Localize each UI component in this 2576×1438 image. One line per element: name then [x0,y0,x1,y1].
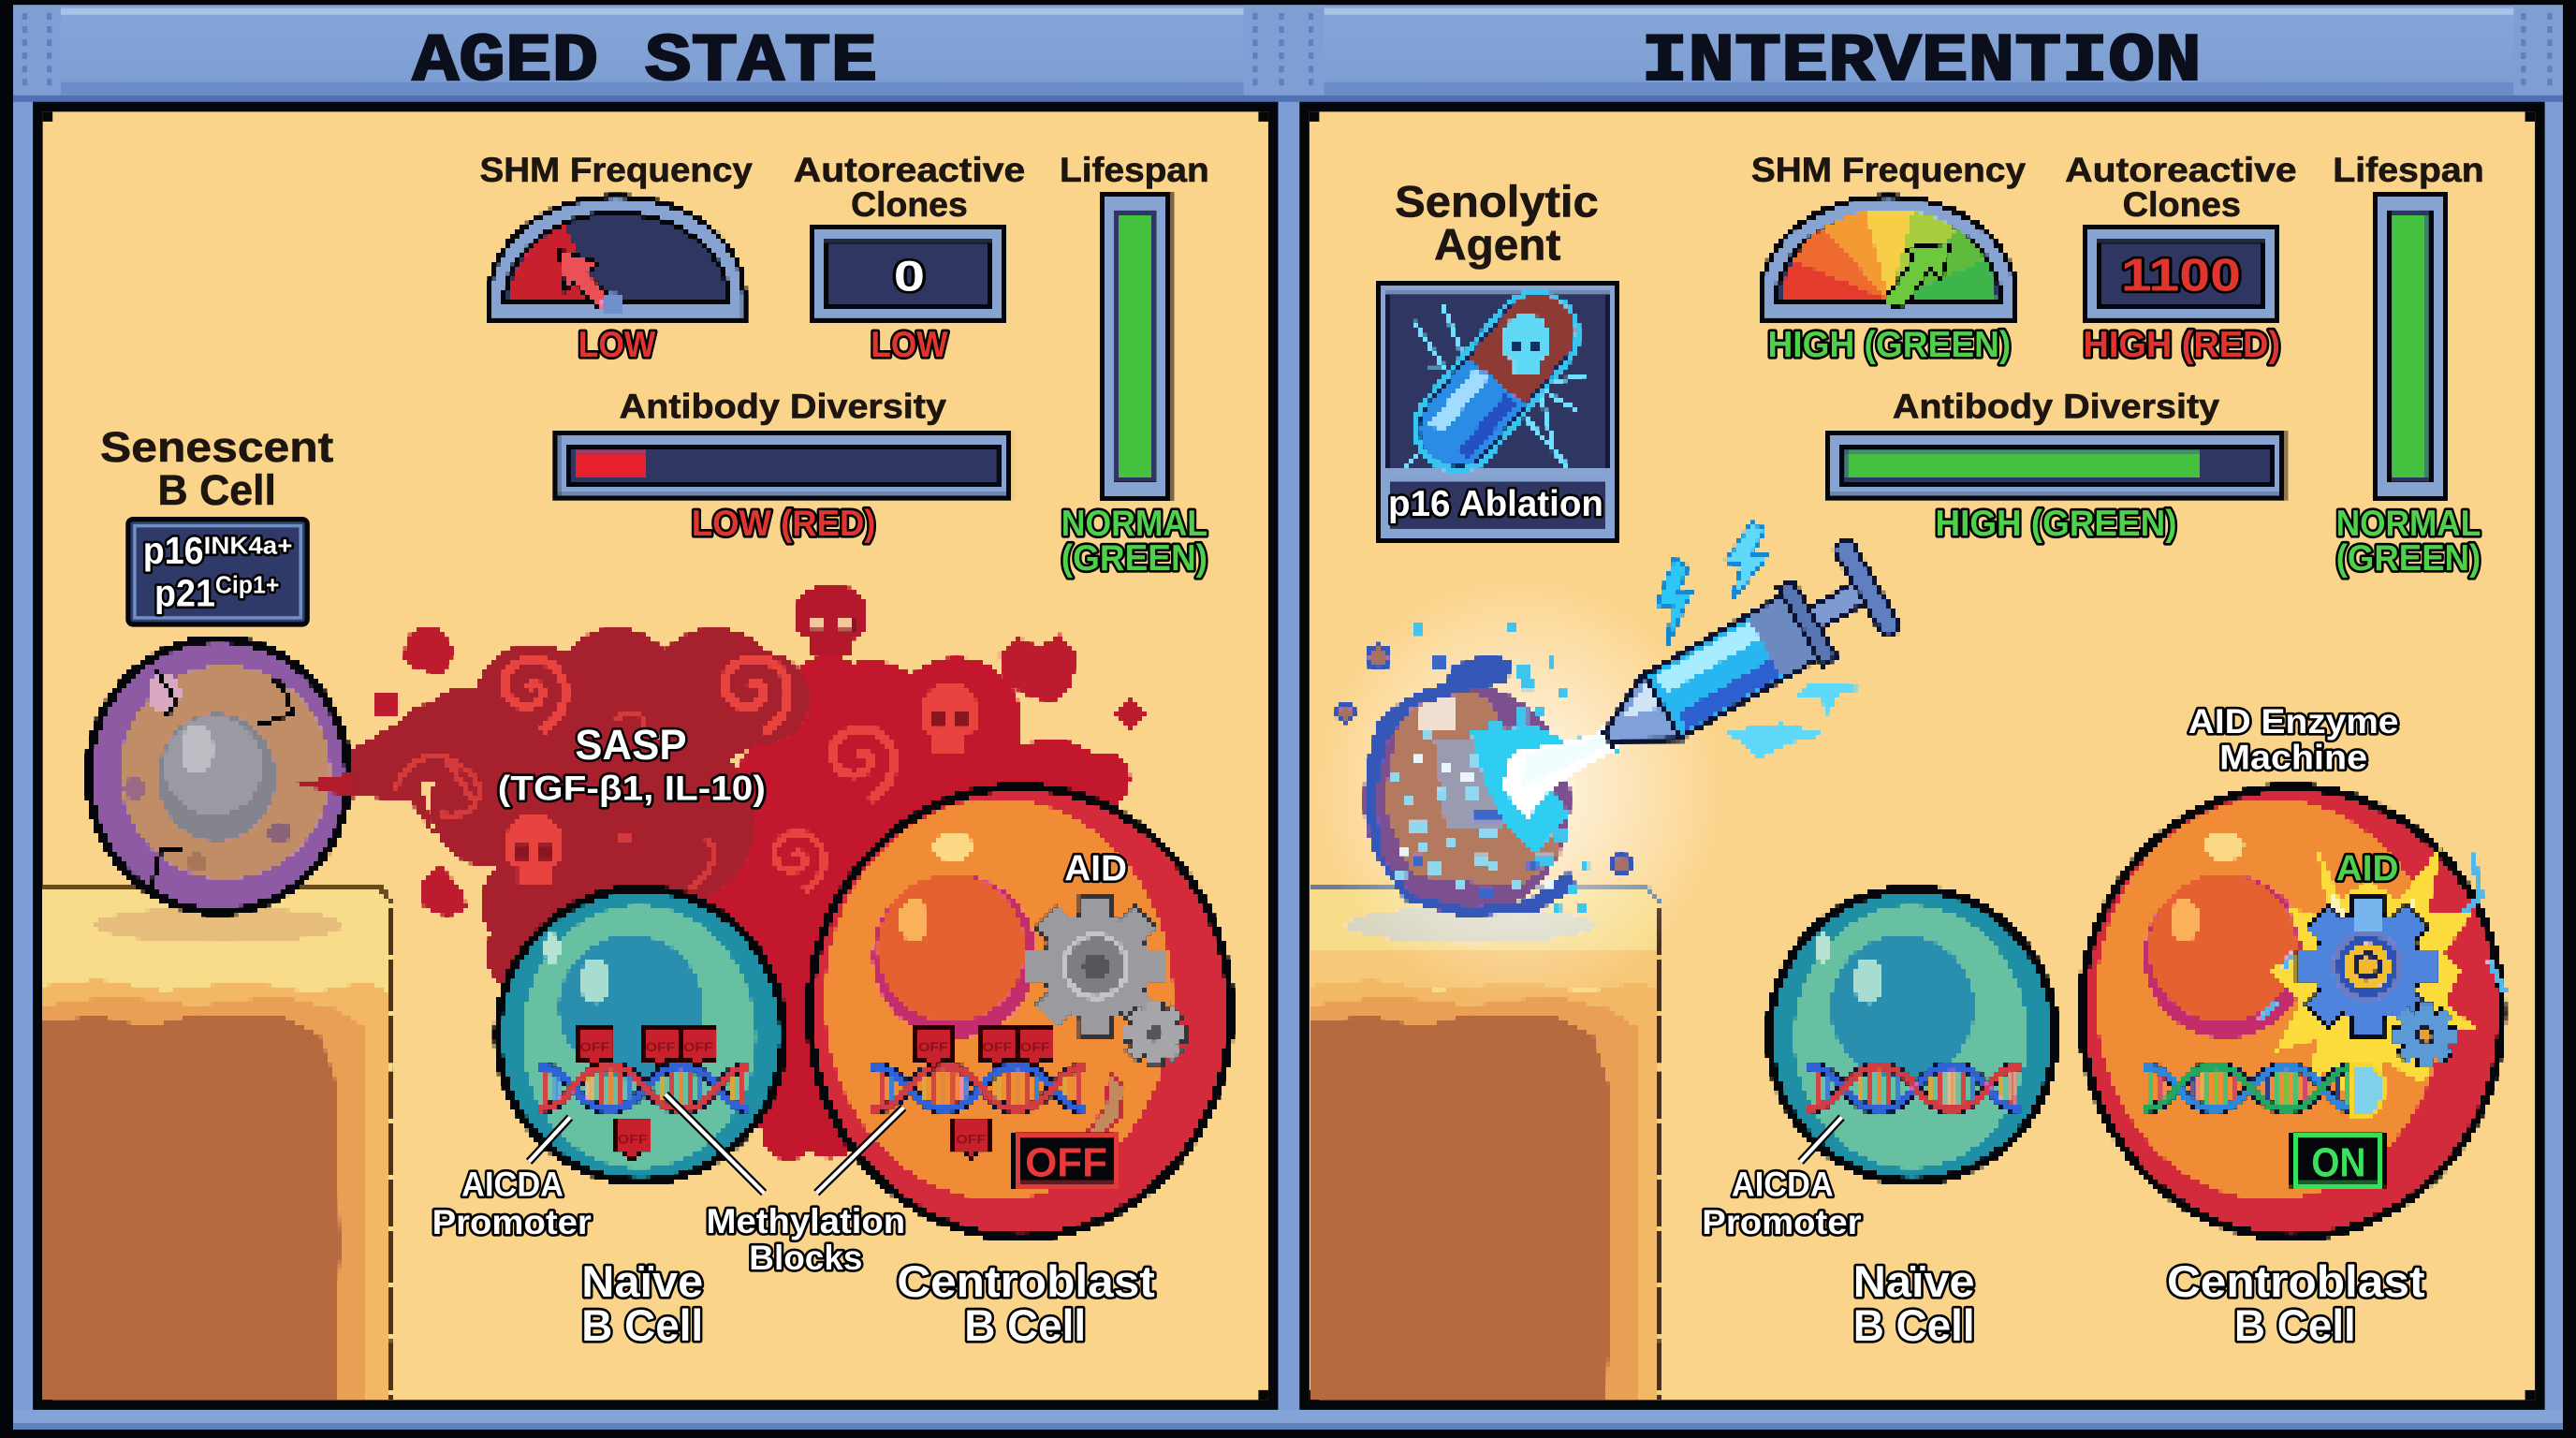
icon: methylation blocks [915,1027,1053,1160]
cell: centroblast B cell aged: OFF [918,1039,948,1054]
counter: autoreactive clones 1100: Autoreactive [2065,151,2297,189]
counter: autoreactive clones 1100 [2065,151,2297,365]
callouts: intervention cell annotations: B Cell [1853,1301,1975,1351]
ledge: right platform [1310,889,1661,1400]
callouts: aged cell annotations: B Cell [964,1301,1086,1351]
cell: naive B cell aged [498,889,783,1181]
bar: antibody diversity high: Antibody Diversity [1893,388,2220,426]
bar: lifespan restored: Lifespan [2333,151,2484,189]
cell: centroblast B cell aged: OFF [1025,1140,1107,1186]
bar: lifespan normal [1060,151,1209,579]
bar: lifespan normal: Lifespan [1060,151,1209,189]
label: senescent B cell [100,423,333,514]
panel: aged state [37,8,1273,1405]
badge: ON [2291,1131,2385,1190]
bar: lifespan normal: (GREEN) [1061,538,1208,579]
counter: autoreactive clones zero: LOW [871,325,948,365]
icon: methylation blocks [577,1027,716,1160]
glow: senolytic burst [1314,575,1725,1003]
cell: centroblast B cell aged [810,787,1231,1238]
label: AID: AID [1064,849,1127,889]
icon: small toxic blobs [376,626,1148,917]
cell: naive B cell restored [1769,889,2056,1181]
counter: autoreactive clones zero [794,151,1025,365]
callouts: intervention cell annotations: Centroblast [2167,1257,2425,1307]
cell: senescent B cell [89,423,353,912]
bar: lifespan restored [2333,151,2484,579]
badge: p16 p21 markers: p21 [154,572,215,615]
callouts: intervention cell annotations [1702,1117,2425,1351]
bar: antibody diversity low: LOW (RED) [692,504,875,544]
cell: centroblast B cell active [2082,702,2506,1238]
callouts: intervention cell annotations: B Cell [2234,1301,2356,1351]
header: aged state [61,8,1244,100]
badge: p16 p21 markers [128,520,307,624]
ledge: left platform [43,889,392,1400]
label: AID enzyme machine [2188,702,2398,776]
cell: naive B cell aged: OFF [683,1039,713,1054]
counter: autoreactive clones 1100: Clones [2123,185,2241,224]
cell: centroblast B cell aged: OFF [1020,1039,1050,1054]
label: senescent B cell: B Cell [157,466,276,514]
cell: naive B cell aged: OFF [618,1132,648,1147]
icon: sparks [2259,846,2506,1104]
gauge: SHM frequency low: LOW [578,325,656,365]
card: senolytic agent: p16 Ablation [1388,484,1603,524]
counter: autoreactive clones zero: Clones [851,185,968,224]
panel: intervention [1305,8,2539,1405]
cell: centroblast B cell aged: OFF [983,1039,1013,1054]
gauge: SHM frequency high: HIGH (GREEN) [1767,325,2011,365]
badge: p16 p21 markers: Cip1+ [215,571,279,599]
callouts: intervention cell annotations: AICDA [1732,1166,1834,1204]
counter: autoreactive clones zero: Autoreactive [794,151,1025,189]
label: AID enzyme machine: Machine [2219,738,2367,776]
callouts: aged cell annotations [432,1094,1155,1351]
label: AID active: AID [2336,849,2398,889]
header: intervention [1325,8,2513,100]
gauge: SHM frequency high [1751,151,2027,365]
label: senescent B cell: Senescent [100,423,333,471]
badge: p16 p21 markers: p16 [143,529,204,572]
bar: lifespan normal: NORMAL [1061,504,1208,544]
title: aged state: AGED STATE [413,23,877,100]
badge: p16 p21 markers: INK4a+ [204,531,292,559]
callouts: intervention cell annotations: Promoter [1702,1203,1862,1241]
bar: antibody diversity high: HIGH (GREEN) [1936,504,2177,544]
card: senolytic agent [1379,178,1617,539]
bar: antibody diversity high [1828,388,2284,544]
callouts: aged cell annotations: Blocks [749,1239,862,1277]
label: SASP factors: (TGF-β1, IL-10) [498,770,766,808]
callouts: aged cell annotations: AICDA [461,1166,564,1204]
callouts: intervention cell annotations: Naïve [1853,1257,1975,1307]
callouts: aged cell annotations: Centroblast [897,1257,1155,1307]
callouts: aged cell annotations: Methylation [707,1202,905,1240]
label: SASP: SASP [575,721,687,769]
gauge: SHM frequency low: SHM Frequency [479,151,753,189]
title: intervention: INTERVENTION [1641,23,2202,100]
gauge: SHM frequency high: SHM Frequency [1751,151,2027,189]
bar: antibody diversity low [557,388,1010,544]
cell: disintegrating senescent cell [1338,621,1643,917]
callouts: aged cell annotations: Promoter [432,1203,592,1241]
cell: centroblast B cell aged: OFF [956,1132,987,1147]
counter: autoreactive clones 1100: 1100 [2121,251,2241,301]
badge: OFF [1012,1131,1120,1190]
counter: autoreactive clones zero: 0 [894,253,925,301]
icon: syringe [1582,522,1902,784]
cell: centroblast B cell active: ON [2311,1140,2365,1186]
card: senolytic agent: Senolytic [1395,178,1599,227]
label: AID enzyme machine: AID Enzyme [2188,702,2398,741]
icon: AID gear off [1027,897,1186,1064]
cloud: SASP toxic cloud [296,584,1148,1160]
icon: AID gear on [2298,897,2456,1066]
bar: lifespan restored: (GREEN) [2336,538,2481,579]
callouts: aged cell annotations: B Cell [581,1301,703,1351]
counter: autoreactive clones 1100: HIGH (RED) [2083,325,2280,365]
bar: antibody diversity low: Antibody Diversity [620,388,946,426]
card: senolytic agent: Agent [1434,220,1561,270]
icon: senolytic pill [1395,272,1598,491]
bar: lifespan restored: NORMAL [2336,504,2481,544]
icon: skull top [795,584,868,656]
gauge: SHM frequency low [479,151,753,365]
cell: naive B cell aged: OFF [646,1039,676,1054]
callouts: aged cell annotations: Naïve [581,1257,703,1307]
cell: naive B cell aged: OFF [580,1039,610,1054]
